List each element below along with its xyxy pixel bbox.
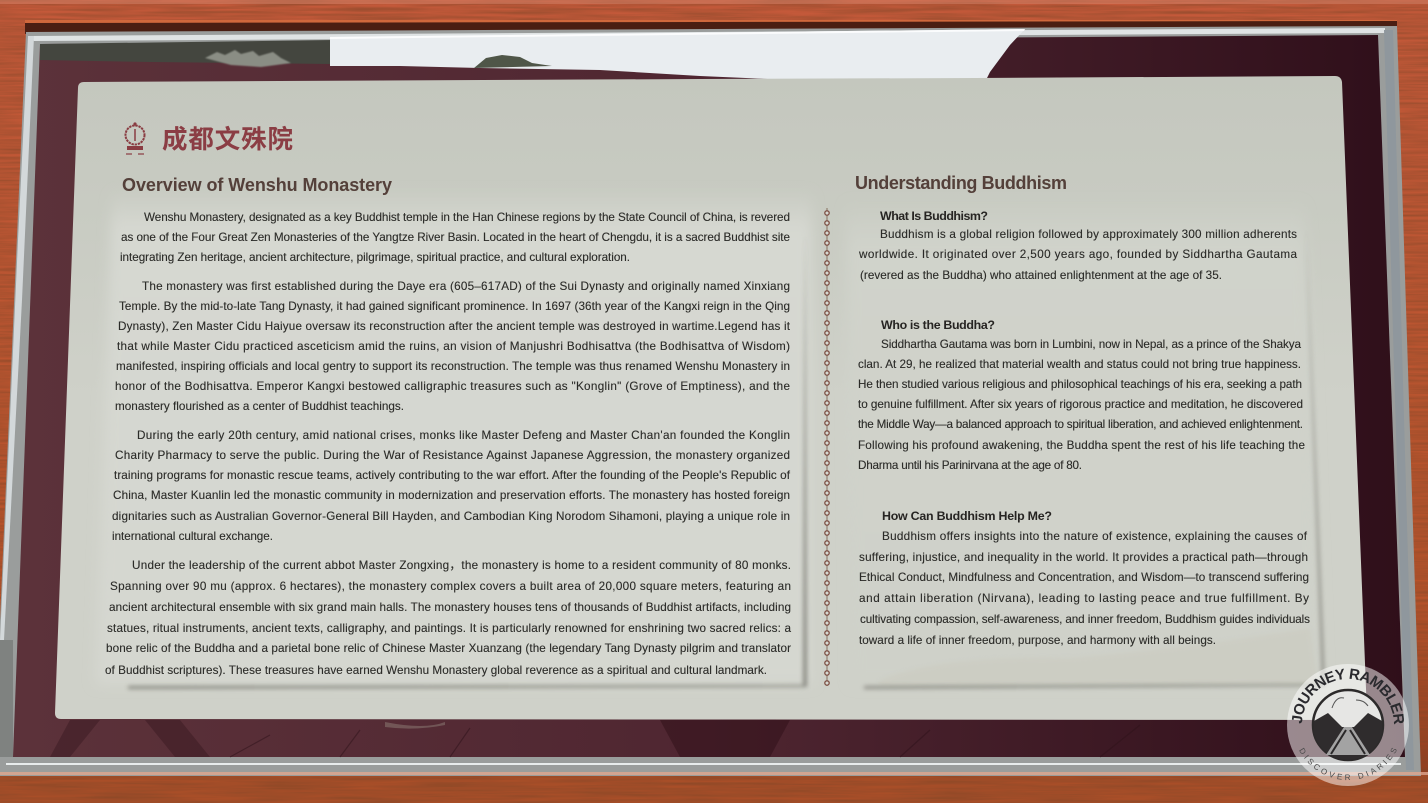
icon: temple emblem: [126, 122, 144, 154]
section: how can buddhism help me: [859, 509, 1310, 647]
text block: overview paragraph 4: bone relic of the Buddha and a parietal bone relic of Chinese Master Xuanzang (the legendary Tang Dynasty pilgrim and translator: [106, 642, 791, 655]
section: how can buddhism help me: cultivating compassion, self-awareness, and inner freedom, Buddhism guides individuals: [860, 613, 1310, 626]
section: what is buddhism: (revered as the Buddha) who attained enlightenment at the age of 35.: [860, 269, 1222, 282]
section: who is the buddha: clan. At 29, he realized that material wealth and status could not bring true happiness.: [858, 358, 1301, 371]
divider: beaded chain: [822, 208, 832, 686]
text block: overview paragraph 3: Charity Pharmacy to serve the public. During the War of Resistance Against Japanese Aggression, the monastery organized: [115, 449, 790, 462]
text block: overview paragraph 2: Temple. By the mid-to-late Tang Dynasty, it had gained significant prominence. In 1697 (36th year of the Kangxi reign in the Qing: [119, 300, 790, 313]
section: who is the buddha: the Middle Way—a balanced approach to spiritual liberation, and achieved enlightenment.: [858, 418, 1303, 431]
text block: overview paragraph 4: statues, ritual instruments, ancient texts, calligraphy, and paintings. It is particularly renowned for enshrining two sacred relics: a: [107, 622, 791, 635]
section: how can buddhism help me: Buddhism offers insights into the nature of existence, explaining the causes of: [882, 530, 1308, 543]
section: who is the buddha: He then studied various religious and philosophical teachings of his era, seeking a path: [858, 378, 1302, 391]
watermark: journey rambler badge: [1287, 664, 1409, 786]
section: how can buddhism help me: Ethical Conduct, Mindfulness and Concentration, and Wisdom—to transcend suffering: [859, 571, 1309, 584]
right text sheet with shadow: [846, 200, 1325, 689]
main cream panel: [55, 76, 1367, 720]
section: how can buddhism help me: and attain liberation (Nirvana), leading to lasting peace and true fulfillment. By: [859, 592, 1309, 605]
text block: overview paragraph 3: training programs for monastic rescue teams, actively contributing to the war effort. After the founding of the People's Republic of: [114, 469, 791, 482]
watermark: journey rambler badge: JOURNEY RAMBLER: [1292, 668, 1404, 724]
reflection: bottom shadows on mat: [50, 720, 1140, 757]
text block: overview paragraph 3: China, Master Kuanlin led the monastic community in modernization and preservation efforts. The monastery has hosted foreign: [113, 489, 790, 502]
text block: overview paragraph 1: as one of the Four Great Zen Monasteries of the Yangtze River Basin. Located in the heart of Chengdu, it is a sacred Buddhist site: [121, 231, 790, 244]
text block: overview paragraph 4: Spanning over 90 mu (approx. 6 hectares), the monastery complex covers a built area of 20,000 square meters, featuring an: [110, 580, 791, 593]
section: what is buddhism: Buddhism is a global religion followed by approximately 300 million adherents: [880, 228, 1297, 241]
text block: overview paragraph 2: monastery flourished as a center of Buddhist teachings.: [115, 400, 404, 413]
text block: overview paragraph 4: Under the leadership of the current abbot Master Zongxing，the monastery is home to a resident community of 80 monks.: [132, 559, 791, 572]
section: who is the buddha: [858, 318, 1305, 472]
text block: overview paragraph 2: manifested, inspiring officials and local gentry to support its reconstruction. The temple was thus renamed Wenshu Monastery in: [116, 360, 790, 373]
reflection: trees and sky: [40, 29, 1025, 88]
section: what is buddhism: [858, 209, 1297, 282]
title: 成都文殊院: [162, 126, 293, 154]
section: who is the buddha: Siddhartha Gautama was born in Lumbini, now in Nepal, as a prince of the Shakya: [881, 338, 1301, 351]
section: how can buddhism help me: suffering, injustice, and inequality in the world. It provides a practical path—through: [859, 551, 1308, 564]
section: what is buddhism: What Is Buddhism?: [880, 209, 988, 223]
text block: overview paragraph 4: of Buddhist scriptures). These treasures have earned Wenshu Monastery global reverence as a spiritual and cultural landmark.: [105, 664, 767, 677]
text block: overview paragraph 3: During the early 20th century, amid national crises, monks like Master Defeng and Master Chan'an founded the Konglin: [137, 429, 790, 442]
text block: overview paragraph 1: [120, 211, 790, 264]
text block: overview paragraph 2: that while Master Cidu practiced asceticism amid the ruins, an vision of Manjushri Bodhisattva (the Bodhisattva of Wisdom): [117, 340, 790, 353]
text block: overview paragraph 2: honor of the Bodhisattva. Emperor Kangxi bestowed calligraphic treasures such as "Konglin" (Grove of Emptiness), and the: [115, 380, 790, 393]
section: who is the buddha: Who is the Buddha?: [881, 318, 995, 332]
text block: overview paragraph 1: integrating Zen heritage, ancient architecture, pilgrimage, spiritual practice, and cultural exploration.: [120, 251, 630, 264]
text block: overview paragraph 2: The monastery was first established during the Daye era (605–617AD) of the Sui Dynasty and originally named Xinxiang: [142, 280, 790, 293]
section: who is the buddha: Following his profound awakening, the Buddha spent the rest of his life teaching the: [858, 439, 1305, 452]
heading: overview: Overview of Wenshu Monastery: [122, 175, 392, 195]
section: who is the buddha: Dharma until his Parinirvana at the age of 80.: [858, 459, 1082, 472]
section: what is buddhism: worldwide. It originated over 2,500 years ago, founded by Siddhartha Gautama: [858, 248, 1297, 261]
section: how can buddhism help me: How Can Buddhism Help Me?: [882, 509, 1052, 523]
text block: overview paragraph 4: [105, 559, 791, 677]
section: how can buddhism help me: toward a life of inner freedom, purpose, and harmony with all beings.: [859, 634, 1216, 647]
text block: overview paragraph 3: [112, 429, 791, 543]
section: who is the buddha: to genuine fulfillment. After six years of rigorous practice and meditation, he discovered: [858, 398, 1303, 411]
text block: overview paragraph 4: ancient architectural ensemble with six grand main halls. The monastery houses tens of thousands of Buddhist artifacts, including: [109, 601, 791, 614]
heading: understanding buddhism: Understanding Buddhism: [855, 173, 1067, 193]
text block: overview paragraph 3: international cultural exchange.: [112, 530, 273, 543]
text block: overview paragraph 3: dignitaries such as Australian Governor-General Bill Hayden, and Cambodian King Norodom Sihamoni, playing a unique role in: [112, 510, 790, 523]
text block: overview paragraph 2: Dynasty), Zen Master Cidu Haiyue oversaw its reconstruction after the ancient temple was destroyed in wartime.Legend has it: [118, 320, 791, 333]
left text sheet with shadow: [96, 190, 812, 689]
text block: overview paragraph 2: [115, 280, 791, 413]
text block: overview paragraph 1: Wenshu Monastery, designated as a key Buddhist temple in the Han Chinese regions by the State Council of China, is revered: [144, 211, 790, 224]
watermark: journey rambler badge: DISCOVER DIARIES: [1299, 748, 1396, 780]
